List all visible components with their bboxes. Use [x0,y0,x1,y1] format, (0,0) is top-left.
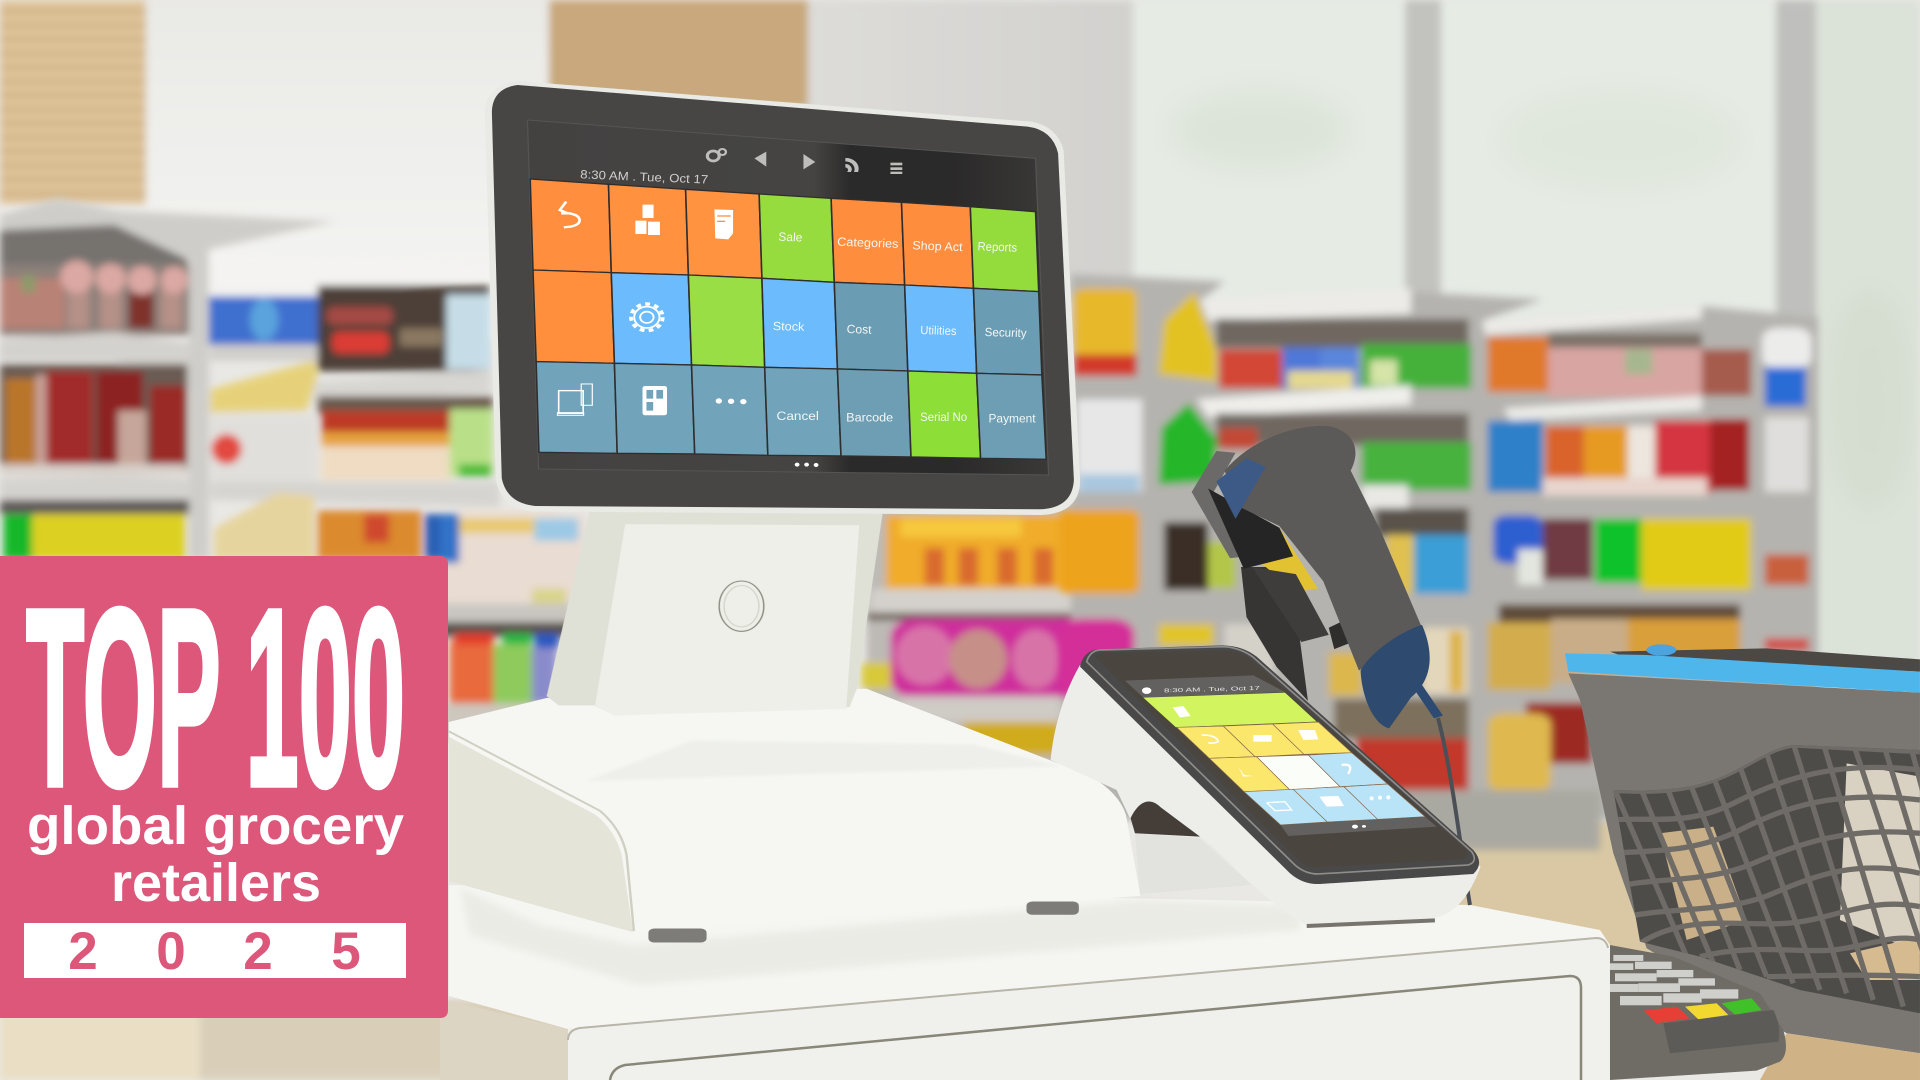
screen labels: Barcode [846,410,893,424]
scanner body [1225,426,1422,671]
centre shelves behind stand [862,500,1200,766]
basket shell [1568,673,1920,1053]
tablet clock: 8:30 AM . Tue, Oct 17 [1164,686,1260,694]
basket interior [1610,648,1920,672]
rubber foot front [648,928,707,943]
screen labels: Security [984,325,1027,340]
monitor glass [492,85,1074,509]
tile icons [557,202,663,415]
display area [527,120,1049,475]
handheld POS tablet on dock [1051,645,1481,928]
screen labels: Sale [778,230,803,244]
tablet app tiles [1143,693,1425,825]
rubber foot rear [1026,901,1079,915]
keypad [1610,955,1738,1005]
screen clock: 8:30 AM . Tue, Oct 17 [580,167,709,186]
screen labels: Serial No [920,410,967,424]
badge subheading: global grocery [27,796,404,856]
screen labels: Payment [988,411,1036,425]
monitor bezel [485,81,1080,515]
app grid [530,179,1046,459]
badge: top 100 global grocery retailers 2025 [0,556,448,1018]
screen labels: Reports [977,239,1018,255]
cash drawer counter [440,885,1610,1080]
badge year: 2 [68,922,98,981]
toolbar icons [707,149,902,174]
badge year: 0 [156,922,186,981]
screen labels: Categories [837,235,899,251]
right shelving gondolas [1060,274,1817,850]
dock cradle [1135,833,1252,894]
tablet tile icons [1173,706,1390,829]
scanner holder and coil cord [1192,451,1362,701]
card payment terminal [1610,945,1920,1080]
scanner cable [1438,718,1470,905]
screen labels [772,230,1036,425]
badge year: 5 [331,922,361,981]
left shelving gondolas [0,198,585,740]
screen labels: Cost [846,322,872,336]
tablet screen [1095,651,1468,867]
badge: top 100 global grocery retailers 2025: retailers [111,853,321,913]
badge panel [0,556,448,1018]
shopping basket [1565,644,1920,1053]
basket blue rim [1565,653,1920,693]
screen labels: Shop Act [912,238,963,254]
handheld barcode scanner [1192,426,1438,728]
screen labels: Utilities [920,323,957,338]
touchscreen monitor [485,81,1080,515]
basket mesh [1610,743,1920,1017]
badge year: 2 [243,922,273,981]
tablet rim [1080,645,1479,884]
POS base unit [449,689,1140,943]
badge year [24,922,406,981]
screen labels: Cancel [777,409,819,423]
screen labels: Stock [772,319,805,334]
monitor stand with round button [547,507,884,715]
